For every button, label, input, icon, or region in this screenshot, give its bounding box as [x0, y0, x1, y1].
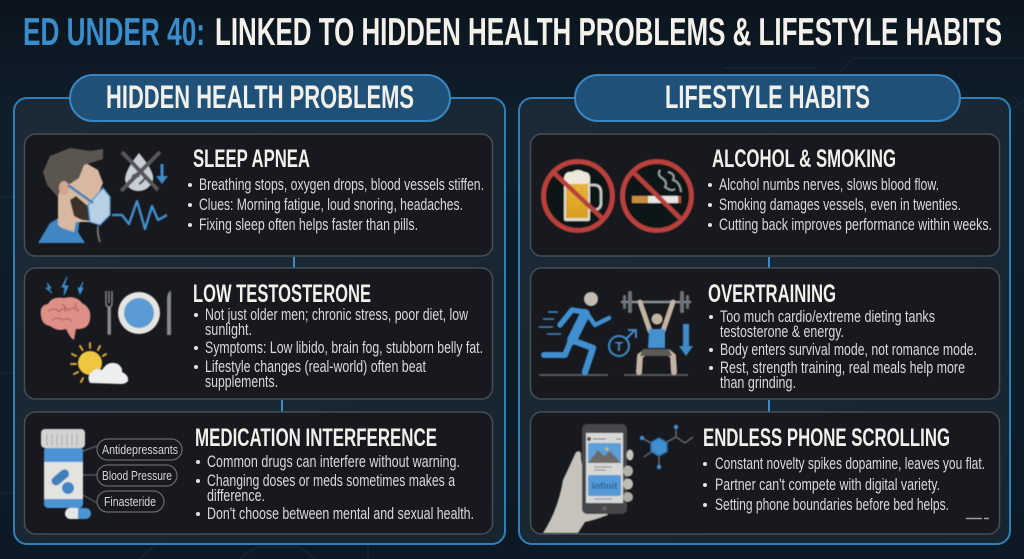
text: low testosterone: supplements.: [205, 373, 278, 391]
label: antidepressants: [97, 439, 182, 460]
icon: testosterone symbol with down arrow: T: [615, 339, 623, 354]
icon: hand holding phone: infinit: [592, 481, 618, 492]
text: overtraining: than grinding.: [720, 374, 796, 392]
heading pill: hidden health problems: [70, 75, 450, 121]
card: endless phone scrolling: [530, 412, 1000, 534]
icon: plate with fork and knife: [106, 291, 171, 335]
text: endless phone scrolling: [703, 424, 985, 514]
text: overtraining: OVERTRAINING: [708, 280, 836, 308]
icon: crossed-out oxygen drop: [121, 152, 168, 191]
text: medication interference: MEDICATION INTERFERENCE: [195, 424, 437, 452]
text: overtraining: Too much cardio/extreme dieting tanks: [720, 308, 935, 326]
text: overtraining: [708, 280, 977, 392]
label: blood pressure: Blood Pressure: [102, 468, 172, 483]
icon: sun behind cloud: [71, 343, 128, 384]
icon: runner: [539, 292, 609, 375]
icon: heartbeat line: [112, 201, 167, 229]
text: low testosterone: sunlight.: [205, 321, 252, 339]
text: sleep apnea: Fixing sleep often helps faster than pills.: [199, 216, 418, 234]
text: low testosterone: Symptoms: Low libido, brain fog, stubborn belly fat.: [205, 339, 483, 357]
icon: testosterone symbol with down arrow: [609, 324, 693, 356]
label: antidepressants: Antidepressants: [102, 442, 178, 457]
card: overtraining: [530, 268, 1000, 399]
icon: no smoking: [622, 162, 692, 230]
text: overtraining: testosterone & energy.: [720, 323, 844, 341]
card: medication interference: [24, 412, 492, 534]
panel: hidden health problems: [14, 75, 505, 544]
text: alcohol and smoking: [708, 145, 992, 234]
text: medication interference: Common drugs can interfere without warning.: [207, 453, 460, 471]
icon: dopamine molecule: [640, 425, 693, 469]
text: medication interference: [195, 424, 474, 523]
text: alcohol and smoking: Alcohol numbs nerves, slows blood flow.: [719, 176, 939, 194]
text: low testosterone: Lifestyle changes (real-world) often beat: [205, 358, 426, 376]
icon: brain with stress bolts: [41, 277, 90, 340]
heading pill: lifestyle habits: LIFESTYLE HABITS: [665, 79, 870, 115]
title: ED UNDER 40:: [23, 11, 205, 54]
label: finasteride: Finasteride: [104, 494, 156, 509]
text: sleep apnea: Breathing stops, oxygen drops, blood vessels stiffen.: [199, 176, 484, 194]
icon: pill bottle: [41, 429, 97, 519]
label: finasteride: [97, 491, 164, 512]
panel: lifestyle habits: [519, 75, 1010, 544]
icon: no alcohol: [544, 162, 612, 230]
heading pill: lifestyle habits: [575, 75, 960, 121]
card: low testosterone: [24, 268, 492, 399]
text: low testosterone: LOW TESTOSTERONE: [193, 280, 371, 308]
text: low testosterone: [193, 280, 483, 391]
icon: man with oxygen mask: [38, 148, 110, 243]
text: sleep apnea: SLEEP APNEA: [193, 145, 310, 173]
text: medication interference: Changing doses or meds sometimes makes a: [207, 472, 456, 490]
text: endless phone scrolling: Partner can't compete with digital variety.: [715, 476, 940, 494]
heading pill: hidden health problems: HIDDEN HEALTH PROBLEMS: [106, 79, 414, 115]
text: low testosterone: Not just older men; chronic stress, poor diet, low: [205, 306, 468, 324]
text: sleep apnea: [188, 145, 484, 234]
card: alcohol and smoking: [530, 134, 1000, 256]
icon: weightlifter: [621, 291, 691, 375]
icon: hand holding phone: [543, 424, 634, 533]
text: sleep apnea: Clues: Morning fatigue, loud snoring, headaches.: [199, 196, 463, 214]
label: blood pressure: [97, 465, 177, 486]
text: medication interference: difference.: [207, 487, 265, 505]
text: alcohol and smoking: ALCOHOL & SMOKING: [712, 145, 896, 173]
text: medication interference: Don't choose between mental and sexual health.: [207, 505, 474, 523]
card: sleep apnea: [24, 134, 492, 256]
